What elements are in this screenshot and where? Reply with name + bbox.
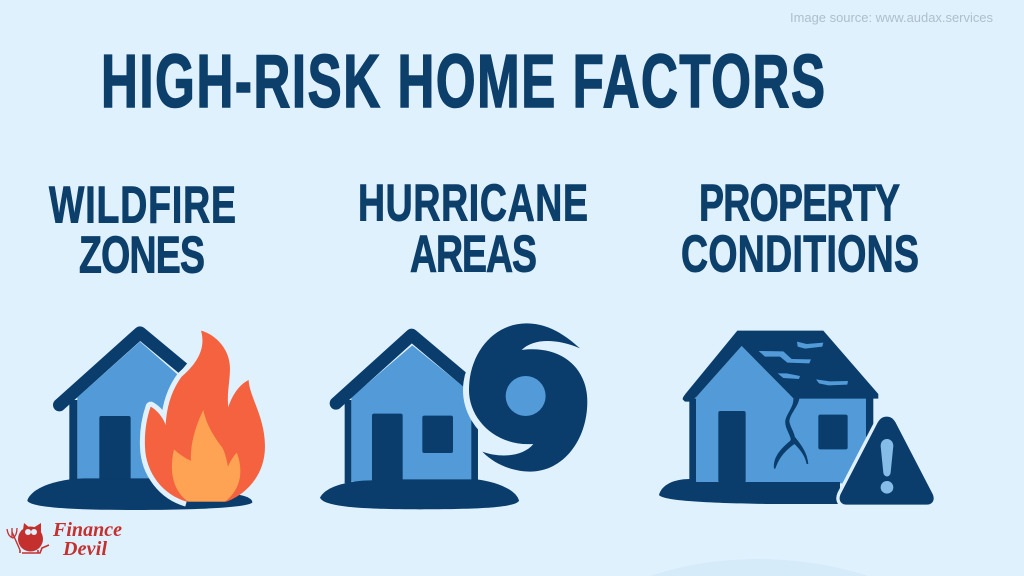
icon: house with hurricane <box>320 323 587 509</box>
title: HIGH-RISK HOME FACTORS <box>101 39 825 123</box>
logo mascot <box>7 523 49 553</box>
heading: wildfire zones <box>49 175 236 284</box>
heading: wildfire zones: ZONES <box>79 225 205 284</box>
logo: finance devil <box>7 519 122 560</box>
heading: hurricane areas: HURRICANE <box>358 173 588 232</box>
heading: hurricane areas: AREAS <box>410 224 537 283</box>
heading: wildfire zones: WILDFIRE <box>49 175 236 234</box>
icon: damaged house with warning <box>659 331 934 505</box>
roof damage <box>759 342 848 385</box>
heading: property conditions: CONDITIONS <box>681 224 919 283</box>
logo: finance devil: Devil <box>62 538 107 560</box>
icon: house with wildfire <box>27 331 265 510</box>
heading: property conditions: PROPERTY <box>699 173 900 232</box>
warning triangle <box>840 417 934 505</box>
hurricane symbol <box>469 323 587 472</box>
heading: property conditions <box>681 173 919 283</box>
logo wordmark: Finance <box>52 519 122 541</box>
heading: hurricane areas <box>358 173 588 283</box>
flame <box>145 331 265 502</box>
wall crack <box>774 398 808 469</box>
image source credit: Image source: www.audax.services <box>790 10 993 25</box>
